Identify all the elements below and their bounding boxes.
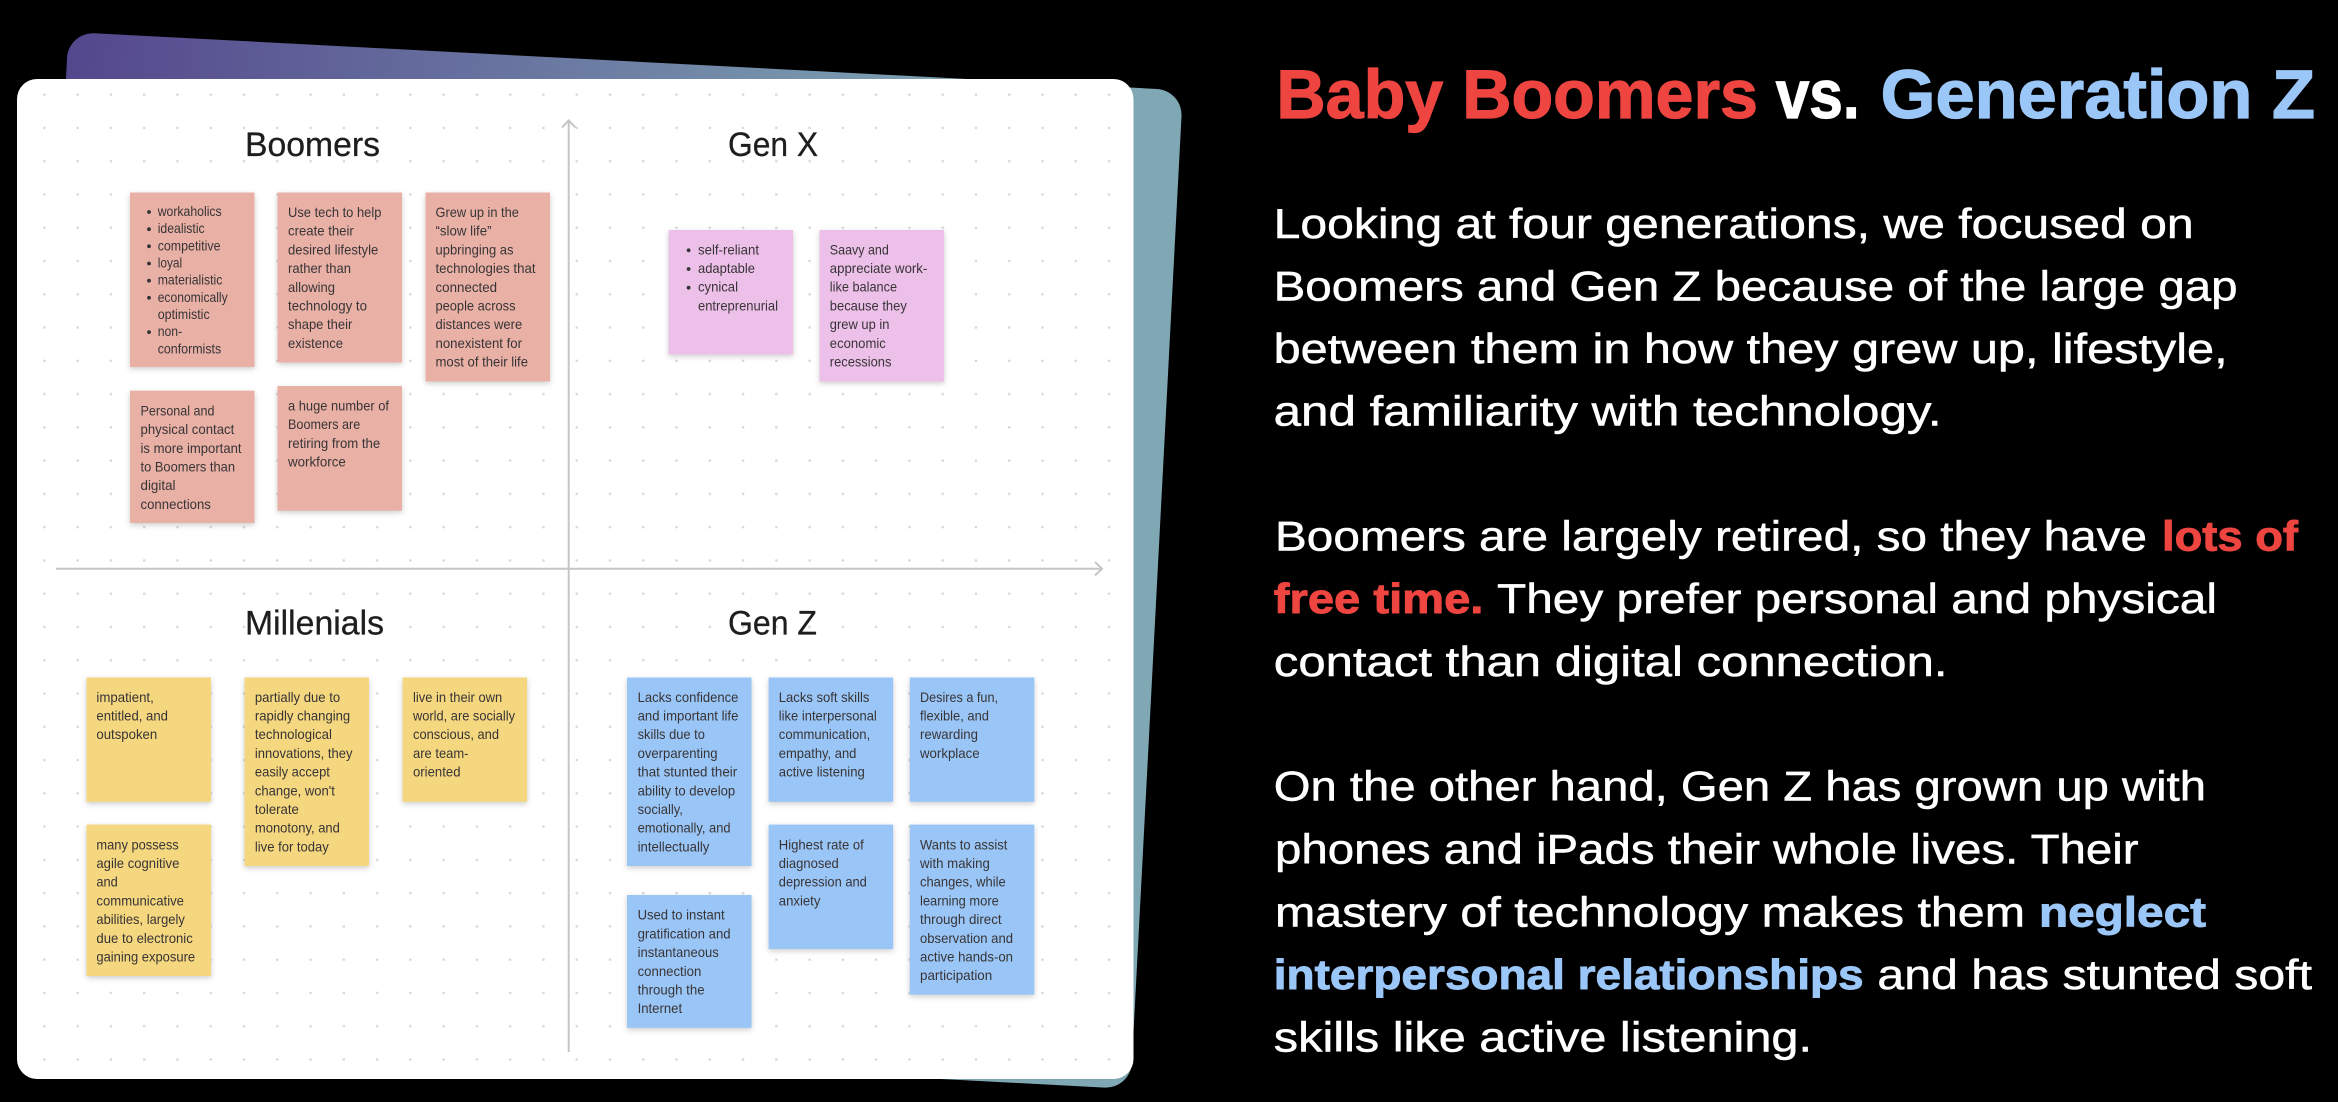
sticky note: Boomers use tech: technology to <box>288 298 367 314</box>
sticky note: Gen X traits list: adaptable <box>698 260 755 276</box>
sticky note: Gen Z instant gratification: Used to instant <box>638 907 725 923</box>
sticky note: Gen Z lacks confidence: ability to develop <box>638 782 735 798</box>
sticky note: Gen Z depression <box>769 825 893 949</box>
sticky note: Boomers slow life: connected <box>436 279 497 295</box>
sticky note: Gen X traits list: self-reliant <box>698 241 759 257</box>
sticky note: Boomers personal contact: physical contact <box>140 421 234 437</box>
sticky note: Boomers personal contact: Personal and <box>140 402 214 418</box>
heading: Boomers: Boomers <box>245 126 380 164</box>
sticky note: Gen X work-life balance: economic <box>830 335 886 351</box>
text block: intro paragraph: Looking at four generations, we focused on <box>1274 200 2194 247</box>
text block: Boomers paragraph: lots of <box>2162 513 2299 560</box>
sticky note: Gen Z lacks confidence: Lacks confidence <box>638 689 739 705</box>
sticky note: Millennials accept change: technological <box>255 726 332 742</box>
sticky note: Boomers slow life: technologies that <box>436 260 536 276</box>
sticky note: Gen Z soft skills: like interpersonal <box>779 708 877 724</box>
sticky note: Millennials accept change: tolerate <box>255 801 299 817</box>
text block: intro paragraph: and familiarity with technology. <box>1274 388 1942 435</box>
sticky note: Boomers retiring: a huge number of <box>288 397 389 413</box>
sticky note: Boomers traits list: idealistic <box>158 220 205 236</box>
sticky note: Boomers slow life <box>426 192 550 382</box>
title: Baby Boomers <box>1276 56 1758 133</box>
text block: Boomers paragraph: contact than digital connection. <box>1274 638 1948 685</box>
sticky note: Millennials cognitive abilities: due to electronic <box>96 930 193 946</box>
text block: Boomers paragraph <box>1274 513 2299 685</box>
title <box>1276 56 2315 133</box>
sticky note: Gen Z instant gratification: Internet <box>638 1000 682 1016</box>
sticky note: Gen Z depression: diagnosed <box>779 855 839 871</box>
sticky note: Boomers retiring: Boomers are <box>288 416 360 432</box>
sticky note: Gen Z lacks confidence: socially, <box>638 801 683 817</box>
sticky note: Gen Z workplace <box>910 678 1034 802</box>
sticky note: Boomers traits list: competitive <box>158 237 221 253</box>
sticky note: Millennials accept change: easily accept <box>255 764 330 780</box>
sticky note: Gen Z workplace: workplace <box>919 745 980 761</box>
sticky note: Millennials cognitive abilities <box>86 825 211 976</box>
sticky note: Gen Z workplace: rewarding <box>920 726 978 742</box>
sticky note: Millennials cognitive abilities: agile cognitive <box>96 855 180 871</box>
sticky note: Millennials own world <box>403 678 527 802</box>
sticky note: Gen Z making changes: observation and <box>920 930 1013 946</box>
sticky note: Boomers slow life: distances were <box>436 316 522 332</box>
sticky note: Gen X work-life balance: recessions <box>830 354 891 370</box>
sticky note: Boomers traits list: materialistic <box>158 272 222 288</box>
sticky note: Millennials own world: conscious, and <box>413 726 499 742</box>
sticky note: Millennials impatient: entitled, and <box>96 708 168 724</box>
sticky note: Boomers personal contact: to Boomers than <box>140 458 235 474</box>
sticky note: Millennials accept change: live for today <box>255 838 329 854</box>
sticky note: Boomers slow life: most of their life <box>436 354 528 370</box>
sticky note: Boomers personal contact: is more important <box>140 440 242 456</box>
sticky note: Gen X work-life balance: appreciate work- <box>830 260 928 276</box>
sticky note: Millennials own world: are team- <box>413 745 469 761</box>
text block: Gen Z paragraph: On the other hand, Gen Z has grown up with <box>1274 763 2206 810</box>
sticky note: Gen X traits list: cynical <box>698 279 738 295</box>
sticky note: Boomers slow life: Grew up in the <box>436 204 519 220</box>
sticky note: Boomers use tech: rather than <box>288 260 351 276</box>
sticky note: Boomers traits list: non- <box>158 323 182 339</box>
sticky note: Boomers retiring: retiring from the <box>288 435 380 451</box>
rotated gradient back card <box>16 32 1183 1089</box>
sticky note: Gen Z making changes: learning more <box>920 892 999 908</box>
sticky note: Boomers traits list <box>130 192 254 367</box>
sticky note: Gen Z instant gratification: connection <box>638 963 701 979</box>
heading: Gen Z: Gen Z <box>728 604 817 642</box>
sticky note: Boomers retiring: workforce <box>287 454 346 470</box>
sticky note: Boomers traits list: conformists <box>158 340 221 356</box>
sticky note: Boomers personal contact: digital <box>140 477 176 493</box>
sticky note: Millennials own world: live in their own <box>413 689 502 705</box>
sticky note: Millennials accept change: partially due to <box>255 689 340 705</box>
text block: intro paragraph: between them in how they grew up, lifestyle, <box>1274 325 2228 372</box>
sticky note: Gen Z making changes: through direct <box>920 911 1002 927</box>
sticky note: Boomers traits list: economically <box>158 289 228 305</box>
sticky note: Gen X traits list: entreprenurial <box>698 297 778 313</box>
title: Generation Z <box>1881 56 2315 133</box>
sticky note: Boomers slow life: upbringing as <box>436 241 514 257</box>
sticky note: Millennials cognitive abilities: communicative <box>96 892 184 908</box>
sticky note: Boomers traits list: loyal <box>158 254 182 270</box>
sticky note: Gen Z making changes: changes, while <box>920 874 1006 890</box>
sticky note: Gen Z soft skills <box>769 678 893 802</box>
text block: Gen Z paragraph: interpersonal relationships <box>1274 951 1864 998</box>
chart axes with arrows <box>56 120 1102 1052</box>
text block: Gen Z paragraph: skills like active listening. <box>1274 1014 1812 1061</box>
sticky note: Gen Z making changes: participation <box>920 967 992 983</box>
sticky note: Boomers personal contact <box>130 391 254 523</box>
sticky note: Millennials accept change: change, won't <box>255 782 335 798</box>
sticky note: Millennials cognitive abilities: abilities, largely <box>96 911 185 927</box>
sticky note: Boomers use tech: desired lifestyle <box>288 241 378 257</box>
sticky note: Millennials cognitive abilities: many possess <box>96 836 179 852</box>
sticky note: Millennials accept change: rapidly changing <box>255 708 350 724</box>
sticky note: Boomers use tech: shape their <box>288 316 353 332</box>
text block: intro paragraph <box>1274 200 2238 435</box>
sticky note: Gen Z instant gratification: through the <box>638 982 705 998</box>
sticky note: Boomers traits list: workaholics <box>157 203 222 219</box>
sticky note: Gen Z lacks confidence: emotionally, and <box>638 820 731 836</box>
sticky note: Gen Z making changes: active hands-on <box>920 948 1013 964</box>
sticky note: Boomers slow life: nonexistent for <box>436 335 522 351</box>
sticky note: Gen Z soft skills: active listening <box>779 764 865 780</box>
sticky note: Gen Z lacks confidence: overparenting <box>638 745 718 761</box>
text block: Gen Z paragraph: neglect <box>2039 889 2206 936</box>
title: vs. <box>1776 56 1860 133</box>
sticky note: Millennials accept change <box>244 678 369 866</box>
sticky note: Gen Z lacks confidence: and important life <box>638 708 739 724</box>
sticky note: Millennials impatient: outspoken <box>96 726 157 742</box>
sticky note: Gen X traits list <box>669 230 793 354</box>
sticky note: Gen X work-life balance: grew up in <box>830 316 889 332</box>
text block: Gen Z paragraph: phones and iPads their whole lives. Their <box>1275 825 2139 872</box>
sticky note: Millennials cognitive abilities: and <box>96 874 118 890</box>
sticky note: Gen X work-life balance <box>820 230 944 381</box>
sticky note: Gen Z instant gratification <box>627 895 752 1028</box>
text block: Boomers paragraph: Boomers are largely retired, so they have <box>1275 513 2147 560</box>
sticky note: Gen Z workplace: Desires a fun, <box>920 689 998 705</box>
sticky note: Millennials accept change: monotony, and <box>255 820 340 836</box>
heading: Millenials: Millenials <box>245 604 384 642</box>
sticky note: Gen Z instant gratification: instantaneous <box>638 944 719 960</box>
sticky note: Gen Z depression: depression and <box>779 874 867 890</box>
sticky note: Gen Z soft skills: empathy, and <box>779 745 856 761</box>
sticky note: Boomers retiring <box>278 386 402 511</box>
sticky note: Boomers slow life: “slow life” <box>436 223 492 239</box>
sticky note: Boomers use tech: Use tech to help <box>288 204 382 220</box>
sticky note: Boomers use tech <box>278 192 402 362</box>
sticky note: Boomers use tech: existence <box>288 335 343 351</box>
sticky note: Gen Z soft skills: communication, <box>779 726 870 742</box>
sticky note: Boomers slow life: people across <box>436 298 516 314</box>
sticky note: Boomers traits list: optimistic <box>158 306 210 322</box>
sticky note: Millennials accept change: innovations, they <box>255 745 352 761</box>
sticky note: Boomers personal contact: connections <box>140 496 211 512</box>
sticky note: Gen Z making changes <box>910 825 1034 995</box>
sticky note: Millennials impatient <box>86 678 211 802</box>
text block: Gen Z paragraph: mastery of technology makes them <box>1275 889 2025 936</box>
sticky note: Gen Z lacks confidence: skills due to <box>638 726 705 742</box>
sticky note: Gen Z making changes: Wants to assist <box>920 836 1007 852</box>
sticky note: Boomers use tech: allowing <box>288 279 335 295</box>
sticky note: Gen X work-life balance: because they <box>830 297 907 313</box>
sticky note: Gen X work-life balance: Saavy and <box>830 241 889 257</box>
text block: Boomers paragraph: They prefer personal and physical <box>1497 575 2217 622</box>
panel: white quadrant board <box>17 79 1134 1079</box>
sticky note: Millennials cognitive abilities: gaining exposure <box>96 948 195 964</box>
sticky note: Gen X work-life balance: like balance <box>830 279 897 295</box>
text block: Gen Z paragraph: and has stunted soft <box>1877 951 2312 998</box>
sticky note: Gen Z soft skills: Lacks soft skills <box>779 689 869 705</box>
sticky note: Gen Z making changes: with making <box>919 855 990 871</box>
sticky note: Gen Z depression: anxiety <box>779 892 820 908</box>
sticky note: Gen Z depression: Highest rate of <box>779 836 864 852</box>
sticky note: Gen Z workplace: flexible, and <box>920 708 989 724</box>
text block: Gen Z paragraph <box>1274 763 2312 1061</box>
sticky note: Boomers use tech: create their <box>288 223 354 239</box>
sticky note: Gen Z instant gratification: gratification and <box>638 925 731 941</box>
sticky note: Gen Z lacks confidence: that stunted their <box>638 764 738 780</box>
text block: intro paragraph: Boomers and Gen Z because of the large gap <box>1274 263 2238 310</box>
sticky note: Gen Z lacks confidence: intellectually <box>638 838 709 854</box>
sticky note: Millennials own world: world, are socially <box>412 708 515 724</box>
text block: Boomers paragraph: free time. <box>1274 575 1483 622</box>
heading: Gen X: Gen X <box>728 126 818 164</box>
sticky note: Millennials impatient: impatient, <box>96 689 154 705</box>
sticky note: Millennials own world: oriented <box>413 764 460 780</box>
sticky note: Gen Z lacks confidence <box>627 678 752 866</box>
